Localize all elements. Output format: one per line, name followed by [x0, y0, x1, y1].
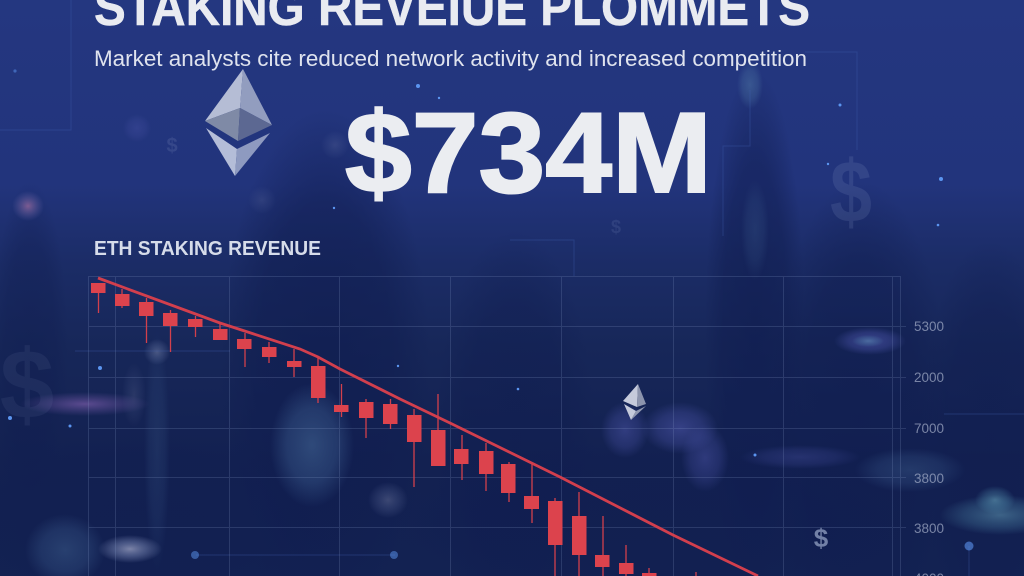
chart: ETH staking revenue candlesticks — [88, 276, 944, 576]
icon: ethereum logo — [205, 69, 272, 176]
axis labels: 2000 — [914, 370, 944, 385]
background dollar signs: $ — [0, 329, 54, 439]
big number: $734M — [345, 90, 712, 217]
background dollar signs: $ — [166, 135, 178, 157]
background dollar signs — [0, 135, 872, 439]
axis labels — [914, 319, 944, 576]
axis labels: 3800 — [914, 471, 944, 486]
background dollar signs: $ — [611, 217, 621, 237]
candle bodies — [91, 283, 656, 576]
icon: small dollar sign: $ — [814, 523, 829, 553]
candle wicks — [98, 283, 696, 576]
icon: small ethereum logo — [623, 384, 646, 420]
trend line — [98, 278, 758, 576]
chart heading: ETH STAKING REVENUE — [94, 238, 321, 260]
subtitle: Market analysts cite reduced network activity and increased competition — [94, 46, 807, 71]
axis labels: 7000 — [914, 421, 944, 436]
background dollar signs: $ — [830, 142, 872, 241]
axis labels: 5300 — [914, 319, 944, 334]
axis labels: 3800 — [914, 521, 944, 536]
chart grid — [88, 276, 906, 576]
